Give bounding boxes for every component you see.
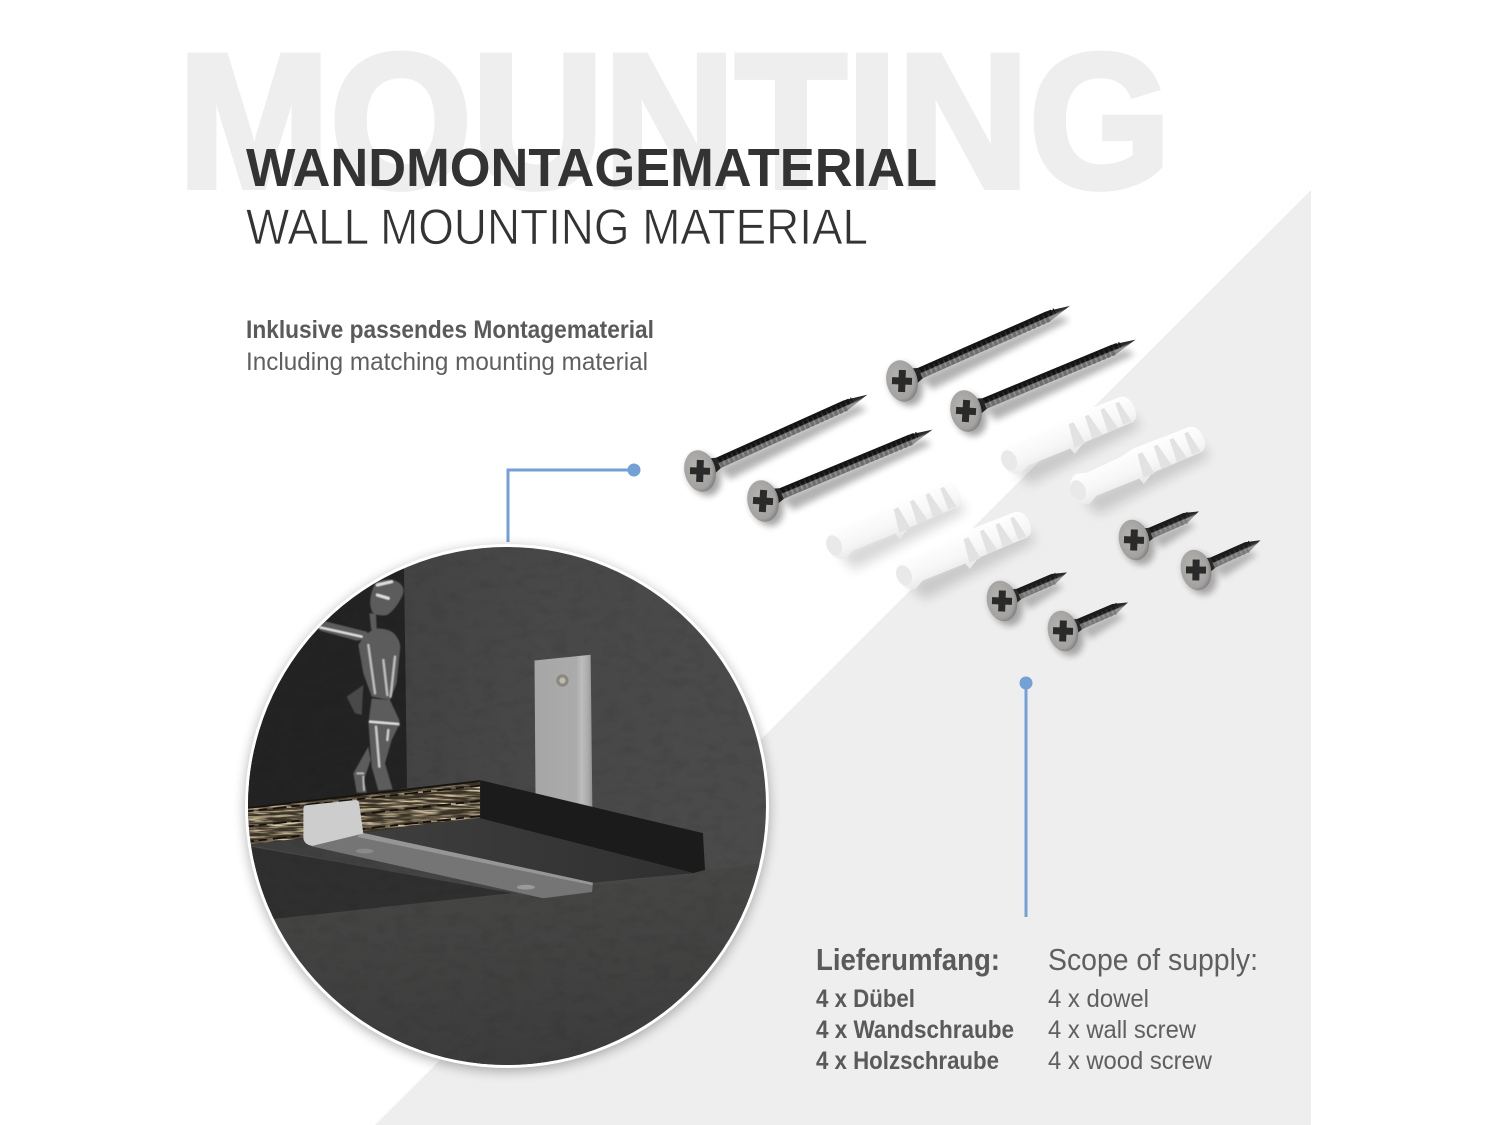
background gray triangle: [375, 190, 1311, 1125]
watermark word MOUNTING: MOUNTING: [178, 15, 1171, 228]
bracket front: [303, 800, 363, 846]
english list heading: Scope of supply:: [1048, 942, 1258, 977]
shadow under shelf: [240, 845, 512, 919]
german list items: 4 x Wandschraube: [816, 1016, 1014, 1044]
supply list: german: [816, 942, 1014, 1075]
title block: [246, 138, 937, 255]
english list items: 4 x dowel: [1048, 985, 1149, 1013]
german list items: 4 x Dübel: [816, 985, 915, 1013]
english heading: WALL MOUNTING MATERIAL: [246, 199, 868, 255]
dark wall corner: [248, 568, 407, 806]
wall: [240, 540, 780, 1080]
connector: photo to hardware: [508, 464, 640, 542]
long wall screws: [673, 285, 1146, 533]
supply list: english: [1048, 942, 1258, 1075]
english list items: 4 x wood screw: [1048, 1047, 1213, 1075]
german heading: WANDMONTAGEMATERIAL: [246, 138, 937, 198]
figurine: [317, 579, 403, 793]
english list items: [1048, 985, 1213, 1075]
photo circle: shelf mounted on wall: [240, 540, 780, 1080]
shelf underside: [420, 818, 692, 882]
german list heading: Lieferumfang:: [816, 942, 1000, 977]
connector: hardware to supply list: [1020, 676, 1032, 917]
german intro line: Inklusive passendes Montagematerial: [246, 316, 654, 344]
english list items: 4 x wall screw: [1048, 1016, 1197, 1044]
wood front edge: [246, 780, 480, 845]
lower wall: [251, 846, 760, 1065]
english intro line: Including matching mounting material: [246, 348, 648, 376]
short wood screws: [976, 491, 1272, 663]
german list items: [816, 985, 1014, 1075]
shelf dark side: [480, 780, 705, 873]
bracket underside: [304, 833, 593, 898]
german list items: 4 x Holzschraube: [816, 1047, 999, 1075]
wall dowels: [821, 392, 1215, 606]
wall plate: [534, 655, 592, 809]
intro text: [246, 316, 654, 376]
